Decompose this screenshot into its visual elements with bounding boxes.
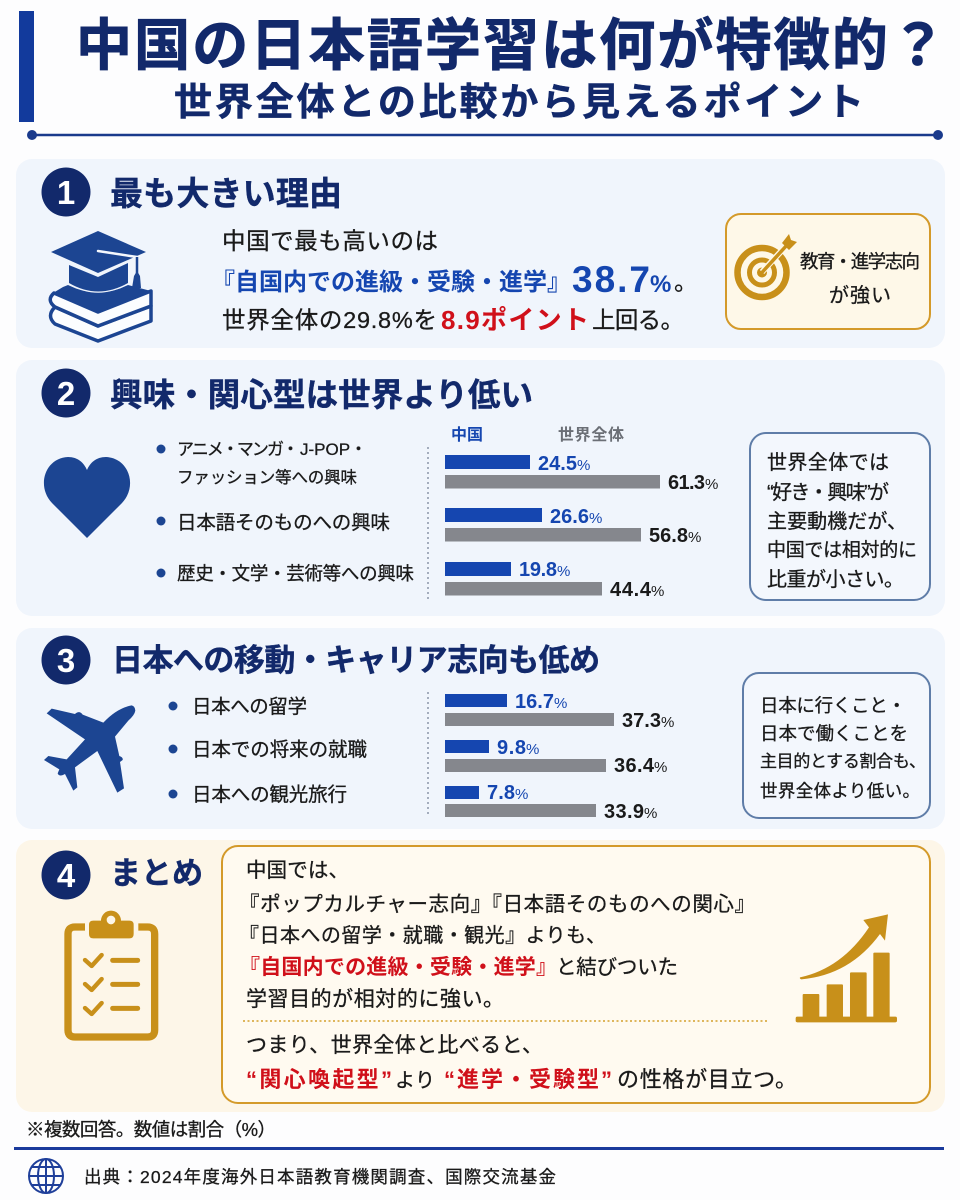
conclusion text: の性格が目立つ。 xyxy=(617,1067,797,1092)
bar chart: interest: % xyxy=(651,583,664,600)
bar chart: mobility: 37.3 xyxy=(622,710,661,732)
bar chart: mobility: % xyxy=(526,741,539,758)
icon: graduation cap on books xyxy=(50,231,151,341)
panel 1 body text: 中国で最も高いのは xyxy=(222,228,438,254)
mobility item list: 日本への観光旅行 xyxy=(192,784,347,806)
panel 1 body text: 上回る。 xyxy=(592,307,684,333)
mobility item list xyxy=(168,696,367,806)
panel 1 body text: 。 xyxy=(674,269,698,295)
number badge 4 xyxy=(42,850,90,900)
bar chart: interest: 44.4 xyxy=(610,579,652,601)
icon: airplane xyxy=(44,705,135,793)
number badge 2 xyxy=(42,368,90,418)
interest item list: 日本語そのものへの興味 xyxy=(177,512,390,534)
bar chart: mobility: % xyxy=(515,786,528,803)
title: 中国の日本語学習は何が特徴的？ xyxy=(76,14,946,77)
mobility item list: 日本での将来の就職 xyxy=(192,739,367,761)
interest item list: J-POP・ xyxy=(300,440,367,459)
number badge 1: 1 xyxy=(57,174,75,211)
bar chart: interest: % xyxy=(557,563,570,580)
legend: 世界全体 xyxy=(558,425,624,444)
number badge 3: 3 xyxy=(57,642,75,679)
summary text: 学習目的が相対的に強い。 xyxy=(246,988,504,1011)
panel 1 body text: 8.9ポイント xyxy=(441,305,589,335)
bar chart: interest: 56.8 xyxy=(649,525,688,547)
callout: mobility note xyxy=(743,673,930,818)
bar chart: mobility: % xyxy=(654,759,667,776)
number badge 2: 2 xyxy=(57,375,75,412)
callout: interest note: 世界全体では xyxy=(767,451,889,474)
bar chart: interest: 24.5 xyxy=(538,453,577,475)
title accent bar xyxy=(19,11,34,122)
conclusion text: “進学・受験型” xyxy=(444,1067,612,1092)
callout: interest note xyxy=(750,433,930,600)
interest item list: アニメ・マンガ・ xyxy=(177,440,299,459)
summary text: 『自国内での進級・受験・進学』 xyxy=(239,956,557,979)
panel 4: summary xyxy=(16,840,945,1112)
callout: education focus: 教育・進学志向 xyxy=(800,251,920,272)
callout: education focus: が強い xyxy=(829,284,891,307)
callout: interest note: 主要動機だが、 xyxy=(767,510,907,533)
icon: globe xyxy=(29,1159,63,1193)
panel 3: mobility and career xyxy=(16,628,945,829)
summary text: 『日本への留学・就職・観光』よりも、 xyxy=(239,924,606,947)
legend xyxy=(451,425,624,444)
mobility item list: 日本への留学 xyxy=(192,696,307,718)
panel 1: biggest reason xyxy=(16,159,945,348)
source line xyxy=(29,1159,556,1193)
callout: education focus xyxy=(726,214,930,329)
bar chart: mobility: 36.4 xyxy=(614,755,655,777)
subtitle: 世界全体との比較から見えるポイント xyxy=(174,82,864,124)
source text: 出典：2024年度海外日本語教育機関調査、国際交流基金 xyxy=(84,1167,556,1187)
summary box xyxy=(222,846,930,1103)
callout: mobility note: 世界全体より低い。 xyxy=(760,781,920,801)
header xyxy=(19,11,946,140)
bar chart: interest: 61.3 xyxy=(668,472,705,494)
number badge 3 xyxy=(42,636,90,684)
interest item list xyxy=(156,440,414,584)
bar chart: interest: % xyxy=(705,476,718,493)
bar chart: interest xyxy=(445,453,718,601)
footnote: ※複数回答。数値は割合（%） xyxy=(26,1119,276,1140)
panel 1 body text: % xyxy=(650,271,671,298)
callout: interest note: 中国では相対的に xyxy=(767,539,917,561)
callout: mobility note: 日本で働くことを xyxy=(760,723,908,744)
icon: clipboard checklist xyxy=(68,911,155,1037)
bar chart: mobility: % xyxy=(554,695,567,712)
bar chart: interest: 26.6 xyxy=(550,506,589,528)
bar chart: mobility: 16.7 xyxy=(515,691,554,713)
bar chart: interest: % xyxy=(577,457,590,474)
icon: growth chart xyxy=(796,914,897,1022)
callout: interest note: 比重が小さい。 xyxy=(767,568,904,591)
panel 1 body text xyxy=(211,228,698,335)
interest item list: 歴史・文学・芸術等への興味 xyxy=(177,563,414,584)
number badge 1 xyxy=(42,168,90,216)
summary text: 『ポップカルチャー志向』『日本語そのものへの関心』 xyxy=(239,893,755,916)
callout: mobility note: 日本に行くこと・ xyxy=(760,695,906,716)
panel 1 body text: 世界全体の29.8%を xyxy=(222,307,437,333)
conclusion text: より xyxy=(395,1070,435,1092)
panel 1 body text: 『自国内での進級・受験・進学』 xyxy=(211,269,571,296)
bar chart: mobility: % xyxy=(661,714,674,731)
conclusion text xyxy=(246,1034,797,1092)
conclusion text: つまり、世界全体と比べると、 xyxy=(246,1034,543,1057)
bar chart: mobility: 9.8 xyxy=(497,737,526,759)
heading 2: 興味・関心型は世界より低い xyxy=(110,377,533,413)
summary text: と結びついた xyxy=(556,956,678,979)
conclusion text: “関心喚起型” xyxy=(246,1067,392,1092)
bar chart: interest: % xyxy=(589,510,602,527)
header rule xyxy=(27,130,943,140)
number badge 4: 4 xyxy=(57,857,76,894)
icon: heart xyxy=(44,457,130,538)
heading 4: まとめ xyxy=(110,856,203,891)
bar chart: interest: % xyxy=(688,529,701,546)
panel 2: interest type xyxy=(16,360,945,616)
bar chart: mobility: 7.8 xyxy=(487,782,515,804)
icon: target xyxy=(738,234,797,297)
bar chart: mobility xyxy=(445,691,674,823)
callout: mobility note: 主目的とする割合も、 xyxy=(760,752,926,771)
legend: 中国 xyxy=(451,426,483,444)
bar chart: interest: 19.8 xyxy=(519,559,557,581)
heading 1: 最も大きい理由 xyxy=(110,175,342,212)
panel 1 body text: 38.7 xyxy=(572,259,650,300)
summary text: 中国では、 xyxy=(246,859,349,882)
callout: interest note: “好き・興味”が xyxy=(767,481,889,504)
summary text xyxy=(239,859,755,1011)
interest item list: ファッション等への興味 xyxy=(177,468,357,487)
heading 3: 日本への移動・キャリア志向も低め xyxy=(112,643,600,678)
bar chart: mobility: % xyxy=(644,805,657,822)
bar chart: mobility: 33.9 xyxy=(604,801,644,823)
